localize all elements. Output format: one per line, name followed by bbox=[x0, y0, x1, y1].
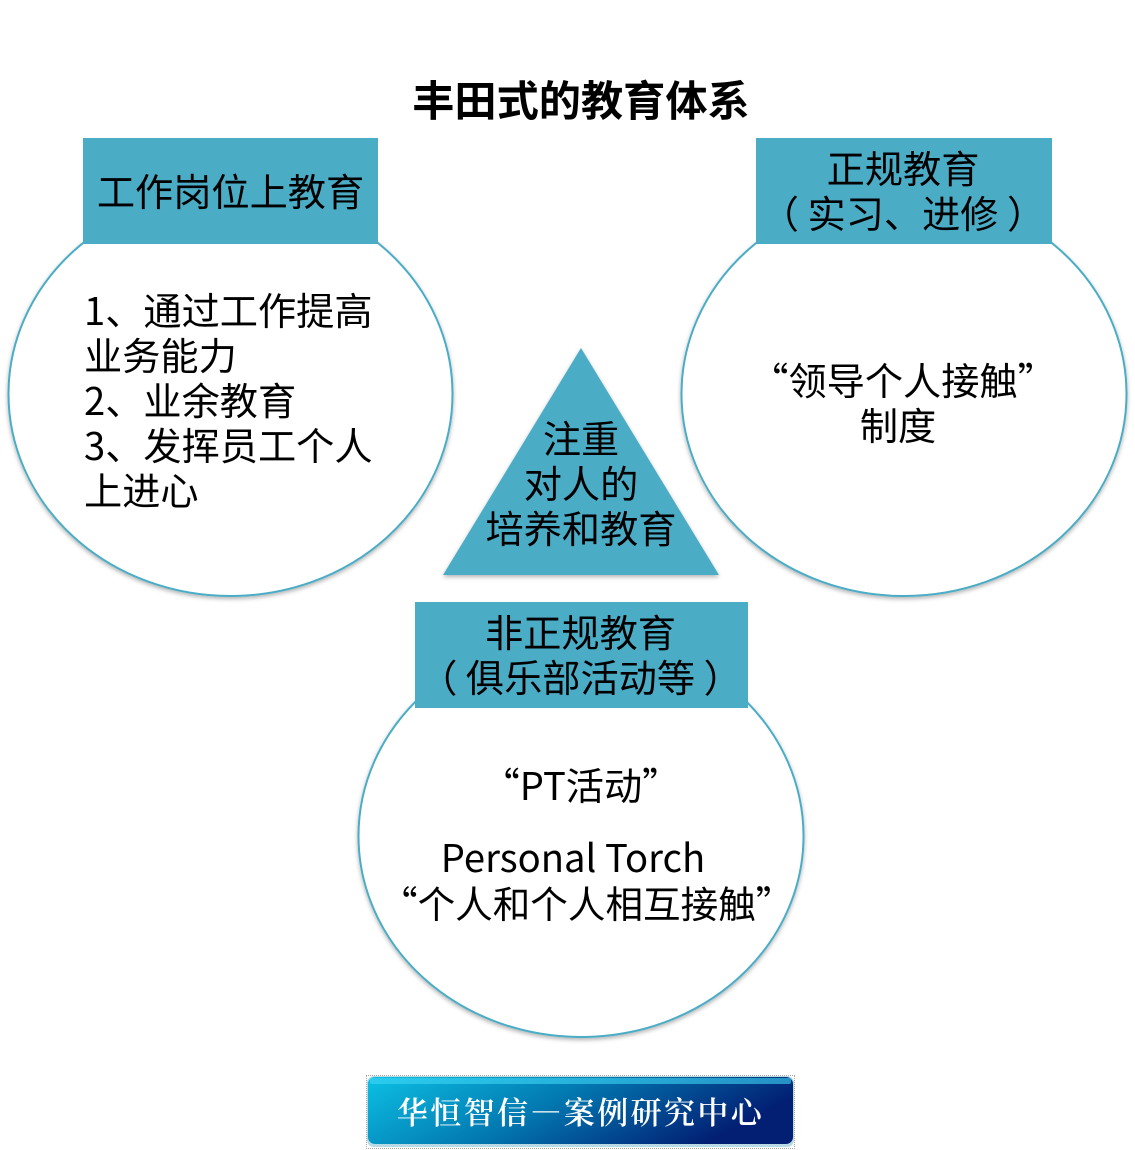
circle: left bbox=[8, 192, 452, 596]
left circle text: 1、通过工作提高 bbox=[84, 282, 373, 337]
right circle text bbox=[750, 352, 1056, 452]
header box: informal education bbox=[415, 602, 748, 708]
bottom circle text: PT activity: “PT活动” bbox=[482, 757, 680, 812]
left circle text: 2、业余教育 bbox=[84, 372, 296, 427]
title: 丰田式的教育体系 bbox=[412, 68, 750, 129]
header text: formal education: 正规教育 bbox=[827, 140, 979, 195]
left circle text bbox=[84, 282, 373, 517]
triangle bbox=[443, 348, 719, 575]
bottom circle text: Personal Torch: Personal Torch bbox=[441, 829, 705, 884]
triangle text bbox=[486, 410, 676, 555]
circle: right bbox=[682, 192, 1126, 596]
right circle text: “领导个人接触” bbox=[750, 352, 1056, 407]
triangle text: 注重 bbox=[543, 410, 619, 465]
left circle text: 3、发挥员工个人 bbox=[84, 417, 373, 472]
header text: informal education: （ 俱乐部活动等 ） bbox=[419, 649, 742, 704]
bottom circle text: person to person: “个人和个人相互接触” bbox=[380, 874, 793, 929]
header box: on-the-job education bbox=[83, 138, 378, 244]
header text: formal education bbox=[761, 140, 1045, 240]
left circle text: 上进心 bbox=[84, 462, 199, 517]
header text: informal education bbox=[419, 604, 742, 704]
header text: informal education: 非正规教育 bbox=[485, 604, 676, 659]
left circle text: 业务能力 bbox=[84, 327, 237, 382]
banner bbox=[366, 1075, 795, 1149]
triangle text: 对人的 bbox=[524, 455, 638, 510]
banner text: 华恒智信—案例研究中心 bbox=[397, 1088, 764, 1133]
circle: bottom bbox=[358, 635, 804, 1037]
right circle text: 制度 bbox=[860, 397, 936, 452]
header text: on-the-job education: 工作岗位上教育 bbox=[97, 163, 364, 218]
triangle text: 培养和教育 bbox=[486, 500, 676, 555]
header box: formal education bbox=[756, 138, 1052, 244]
header text: formal education: （ 实习、进修 ） bbox=[761, 185, 1045, 240]
